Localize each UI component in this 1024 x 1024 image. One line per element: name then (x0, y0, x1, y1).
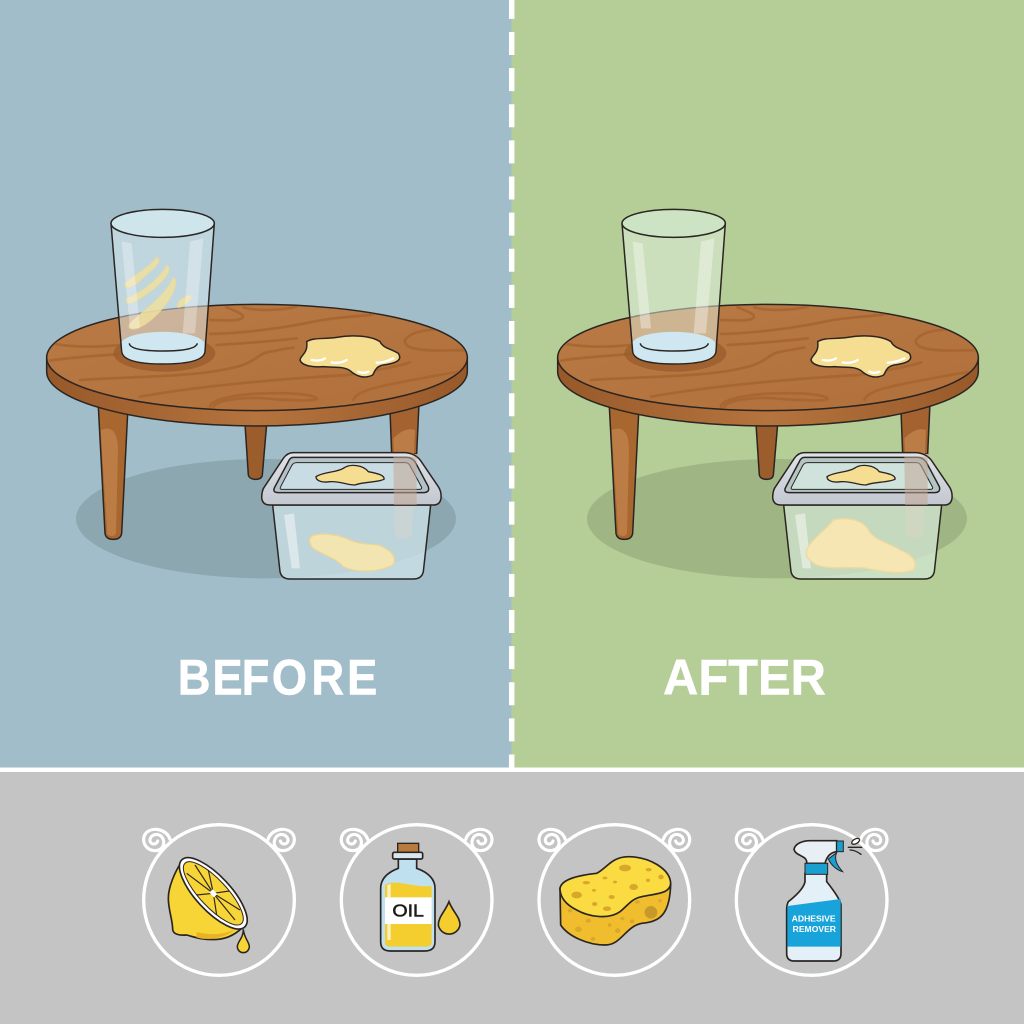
label text: ADHESIVE (792, 914, 836, 923)
container body (784, 505, 942, 579)
streak (795, 513, 811, 568)
right leg (390, 403, 419, 454)
grease on lid (827, 465, 895, 485)
container with grease (773, 453, 952, 579)
water (632, 332, 716, 364)
leg tint over lid (393, 457, 417, 505)
leg seen through container (904, 454, 928, 538)
glass with smears (111, 209, 214, 364)
panel: before (0, 0, 512, 768)
table top (47, 304, 467, 411)
container with grease (262, 453, 441, 579)
grease inside (310, 534, 394, 571)
label text: OIL (392, 901, 424, 921)
leg tint over lid (904, 457, 928, 505)
table (558, 304, 978, 539)
streak (284, 513, 300, 568)
floor shadow (76, 459, 456, 578)
wood grain (50, 307, 467, 407)
label text: REMOVER (793, 925, 836, 934)
heading: after: AFTER (663, 648, 826, 706)
left leg (98, 407, 128, 539)
leg seen through container (393, 454, 417, 538)
clean glass (622, 209, 725, 364)
table top (558, 304, 978, 411)
table rim (558, 357, 978, 426)
label text (792, 914, 836, 934)
grease spill on table (811, 336, 911, 377)
table (47, 304, 467, 539)
lid (262, 453, 441, 505)
icon: oil bottle (341, 825, 492, 975)
heading: before: BEFORE (178, 650, 377, 706)
glass shadow on table (113, 335, 215, 372)
container body (273, 505, 431, 579)
icon: lemon (144, 825, 294, 975)
panel: after (512, 0, 1024, 768)
water (121, 332, 205, 364)
icon: sponge (539, 825, 690, 975)
panel: cleaning supplies (0, 768, 1024, 1024)
table rim (47, 357, 467, 426)
left leg (609, 407, 639, 539)
wood grain (561, 307, 978, 407)
back leg (756, 424, 778, 479)
grease on lid (316, 465, 384, 485)
glass shadow on table (624, 335, 726, 372)
back leg (245, 424, 267, 479)
icon: adhesive remover spray (736, 825, 887, 975)
lid (773, 453, 952, 505)
grease spill on table (300, 336, 400, 377)
grease inside (806, 519, 915, 573)
greasy smears (125, 257, 191, 329)
floor shadow (587, 459, 967, 578)
right leg (901, 403, 930, 454)
